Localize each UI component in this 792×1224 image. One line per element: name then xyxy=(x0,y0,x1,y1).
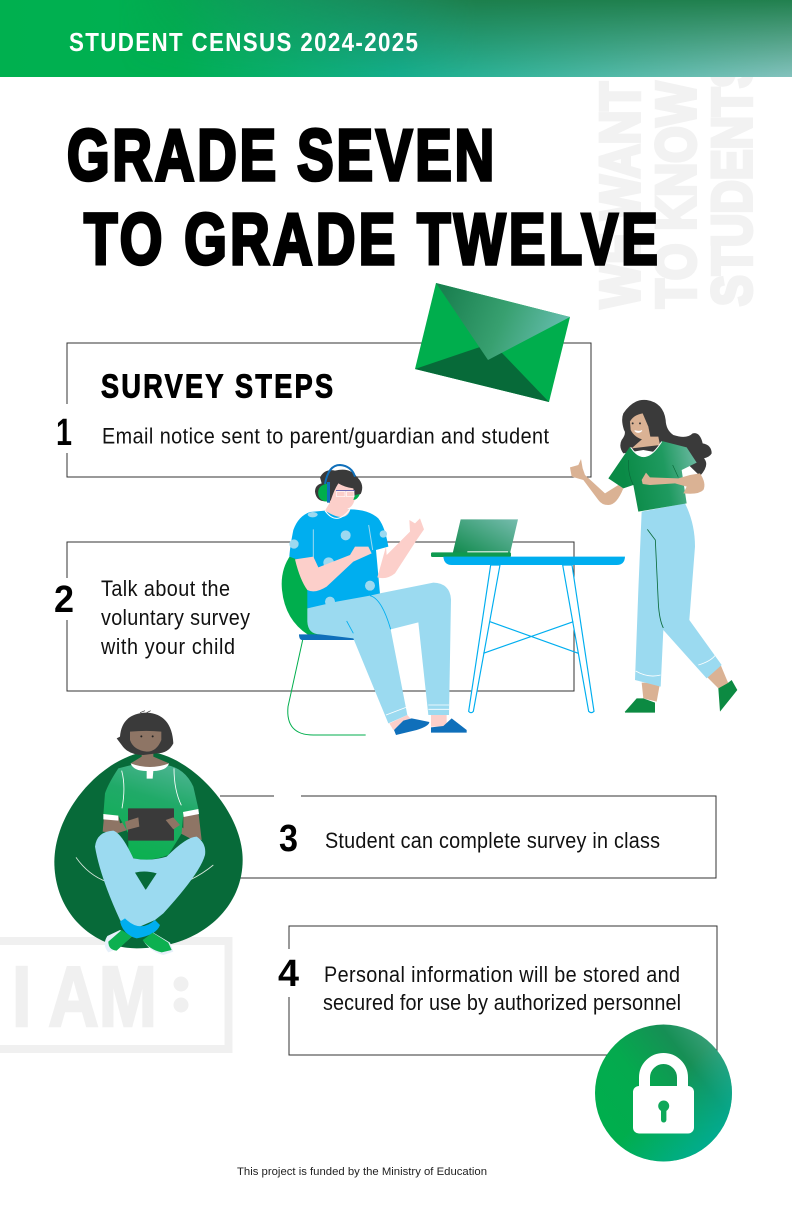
girl's pants xyxy=(95,831,205,938)
illustration: standing woman xyxy=(570,400,737,713)
step 4 text: secured for use by authorized personnel xyxy=(323,991,681,1015)
footer note: This project is funded by the Ministry of Education xyxy=(237,1166,487,1178)
panel: step 4 xyxy=(278,926,717,1055)
step 2 text: with your child xyxy=(100,635,235,659)
panel: step 3 xyxy=(220,796,716,878)
watermark: I am: I AM xyxy=(12,950,157,1045)
woman's hair xyxy=(620,400,712,476)
step 4 text: Personal information will be stored and xyxy=(324,963,680,987)
watermark: we want to know students: WE WANT xyxy=(588,82,651,308)
icon: padlock xyxy=(595,1024,732,1162)
main title: GRADE SEVEN xyxy=(67,115,494,196)
man's pants xyxy=(307,583,451,723)
step 4 number: 4 xyxy=(278,953,299,995)
banner title: STUDENT CENSUS 2024-2025 xyxy=(69,28,418,57)
woman's legs xyxy=(642,665,728,702)
woman's shirt xyxy=(608,441,697,512)
watermark: I am xyxy=(0,941,228,1049)
chair xyxy=(282,555,366,735)
step 2 text: Talk about the xyxy=(101,577,230,601)
step 1 heading: SURVEY STEPS xyxy=(101,369,333,405)
watermark: we want to know students xyxy=(588,57,763,308)
girl's head xyxy=(117,711,173,779)
step 3 text: Student can complete survey in class xyxy=(325,829,660,853)
table top xyxy=(443,557,625,565)
panel: step 2 xyxy=(54,542,574,691)
woman's raised arm xyxy=(570,459,623,505)
main title xyxy=(67,115,658,280)
illustration: table and laptop xyxy=(431,519,625,713)
step 3 number: 3 xyxy=(279,818,298,860)
woman's shoes xyxy=(625,680,737,713)
girl's arms xyxy=(103,812,202,840)
step 2 text: voluntary survey xyxy=(101,606,251,630)
girl's hands xyxy=(125,817,180,830)
icon: envelope xyxy=(415,283,570,402)
watermark: we want to know students: STUDENTS xyxy=(700,57,763,306)
header banner xyxy=(0,0,792,77)
illustration: girl on bean bag xyxy=(54,711,243,955)
woman's neck and face xyxy=(630,413,660,448)
table legs xyxy=(469,565,594,713)
bean bag xyxy=(54,752,243,948)
man's arms xyxy=(295,518,424,591)
woman's bent arm xyxy=(642,473,704,494)
panel: step 1 xyxy=(56,343,591,477)
man's shoes xyxy=(394,718,467,735)
main title: TO GRADE TWELVE xyxy=(84,199,658,280)
man's ankles xyxy=(389,715,447,730)
girl's tablet xyxy=(128,808,174,841)
laptop xyxy=(431,519,518,557)
step 2 text xyxy=(100,577,251,659)
step 4 text xyxy=(323,963,681,1015)
watermark: we want to know students: TO KNOW xyxy=(644,82,707,308)
step 2 number: 2 xyxy=(54,579,74,621)
woman's pants xyxy=(635,503,722,687)
step 1 text: Email notice sent to parent/guardian and student xyxy=(102,425,549,449)
man's head xyxy=(315,465,362,518)
illustration: seated man xyxy=(282,465,467,735)
man's shirt xyxy=(289,509,388,608)
step 1 number: 1 xyxy=(56,412,72,454)
girl's shoes xyxy=(105,930,173,955)
girl's shirt xyxy=(103,765,199,860)
